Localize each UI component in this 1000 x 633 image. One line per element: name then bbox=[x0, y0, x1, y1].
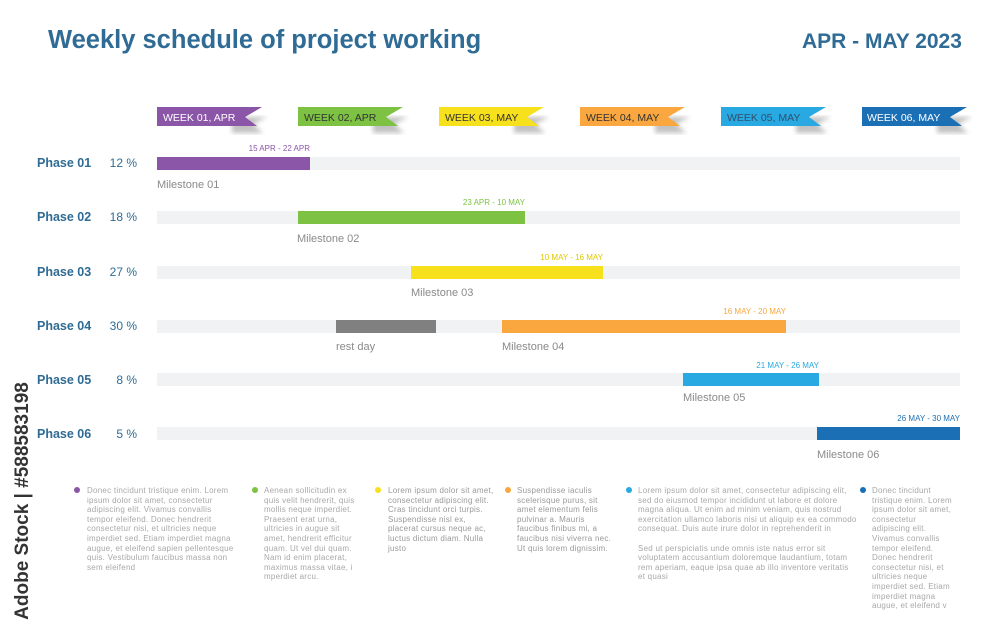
phase 05 row: 21 MAY - 26 MAY bbox=[756, 361, 819, 370]
flag week 03 bbox=[439, 107, 549, 133]
phase 06 row: Milestone 06 bbox=[817, 449, 879, 461]
phase 04 row: rest day bbox=[336, 341, 375, 353]
phase 03 row: 27 % bbox=[110, 265, 137, 279]
note 2: Aenean sollicitudin ex quis velit hendrerit, quis mollis neque imperdiet. Praesent erat urna, ultricies in augue sit amet, hendrerit efficitur quam. Ut vel dui quam. Nam id enim placerat, maximus massa vitae, i mperdiet arcu. bbox=[264, 486, 355, 581]
phase 02 row: Phase 02 bbox=[37, 210, 91, 224]
flag week 05 bbox=[721, 107, 831, 133]
phase 04 row: Milestone 04 bbox=[502, 341, 564, 353]
note 4: Suspendisse iaculis scelerisque purus, sit amet elementum felis pulvinar a. Mauris faucibus finibus mi, a faucibus nisi viverra nec. Ut quis lorem dignissim. bbox=[517, 486, 611, 553]
phase 04 row: 16 MAY - 20 MAY bbox=[723, 307, 786, 316]
phase 03 row: Milestone 03 bbox=[411, 287, 473, 299]
phase 03 row: Phase 03 bbox=[37, 265, 91, 279]
flag week 03: WEEK 03, MAY bbox=[445, 112, 518, 124]
flag week 05: WEEK 05, MAY bbox=[727, 112, 800, 124]
flag week 06: WEEK 06, MAY bbox=[867, 112, 940, 124]
phase 04 row: 30 % bbox=[110, 319, 137, 333]
flag week 02: WEEK 02, APR bbox=[304, 112, 377, 124]
note 5 bbox=[626, 486, 857, 581]
phase 04 row bbox=[37, 307, 960, 353]
phase 05 row: Phase 05 bbox=[37, 373, 91, 387]
phase 01 row: Milestone 01 bbox=[157, 179, 219, 191]
phase 01 row: 12 % bbox=[110, 156, 137, 170]
flag week 04: WEEK 04, MAY bbox=[586, 112, 659, 124]
flag week 01 bbox=[157, 107, 267, 133]
note 1: Donec tincidunt tristique enim. Lorem ipsum dolor sit amet, consectetur adipiscing elit. Vivamus convallis tempor eleifend. Donec hendrerit consectetur nisi, et ultricies neque imperdiet sed. Etiam imperdiet magna augue, et eleifend sapien pellentesque quis. Vestibulum faucibus massa non sem eleifend bbox=[87, 486, 234, 572]
phase 01 row: 15 APR - 22 APR bbox=[249, 144, 310, 153]
phase 06 row: Phase 06 bbox=[37, 427, 91, 441]
phase 01 row bbox=[37, 144, 960, 191]
phase 03 row: 10 MAY - 16 MAY bbox=[540, 253, 603, 262]
phase 05 row bbox=[37, 361, 960, 404]
note 5: Sed ut perspiciatis unde omnis iste natus error sit voluptatem accusantium doloremque laudantium, totam rem aperiam, eaque ipsa quae ab illo inventore veritatis et quasi bbox=[638, 544, 849, 581]
watermark: Adobe Stock | #588583198 bbox=[12, 382, 33, 620]
phase 01 row: Phase 01 bbox=[37, 156, 91, 170]
phase 02 row: 23 APR - 10 MAY bbox=[463, 198, 525, 207]
phase 04 row: Phase 04 bbox=[37, 319, 91, 333]
phase 05 row: 8 % bbox=[116, 373, 137, 387]
phase 03 row bbox=[37, 253, 960, 299]
date range: APR - MAY 2023 bbox=[802, 30, 962, 53]
flag week 04 bbox=[580, 107, 690, 133]
phase 02 row: Milestone 02 bbox=[297, 233, 359, 245]
note 3: Lorem ipsum dolor sit amet, consectetur adipiscing elit. Cras tincidunt orci turpis. Suspendisse nisl ex, placerat cursus neque ac, luctus dictum diam. Nulla justo bbox=[388, 486, 493, 553]
flag week 01: WEEK 01, APR bbox=[163, 112, 236, 124]
note 5: Lorem ipsum dolor sit amet, consectetur adipiscing elit, sed do eiusmod tempor incididunt ut labore et dolore magna aliqua. Ut enim ad minim veniam, quis nostrud exercitation ullamco laboris nisi ut aliquip ex ea commodo consequat. Duis aute irure dolor in reprehenderit in bbox=[638, 486, 857, 533]
note 6: Donec tincidunt tristique enim. Lorem ipsum dolor sit amet, consectetur adipiscing elit. Vivamus convallis tempor eleifend. Donec hendrerit consectetur nisi, et ultricies neque imperdiet sed. Etiam imperdiet magna augue, et eleifend v bbox=[872, 486, 952, 610]
phase 02 row: 18 % bbox=[110, 210, 137, 224]
phase 05 row: Milestone 05 bbox=[683, 392, 745, 404]
phase 02 row bbox=[37, 198, 960, 245]
phase 06 row: 5 % bbox=[116, 427, 137, 441]
title: Weekly schedule of project working bbox=[48, 26, 481, 54]
flag week 06 bbox=[862, 107, 972, 133]
week flags bbox=[157, 107, 970, 135]
phase 06 row: 26 MAY - 30 MAY bbox=[897, 414, 960, 423]
phase 06 row bbox=[37, 414, 960, 461]
flag week 02 bbox=[298, 107, 408, 133]
